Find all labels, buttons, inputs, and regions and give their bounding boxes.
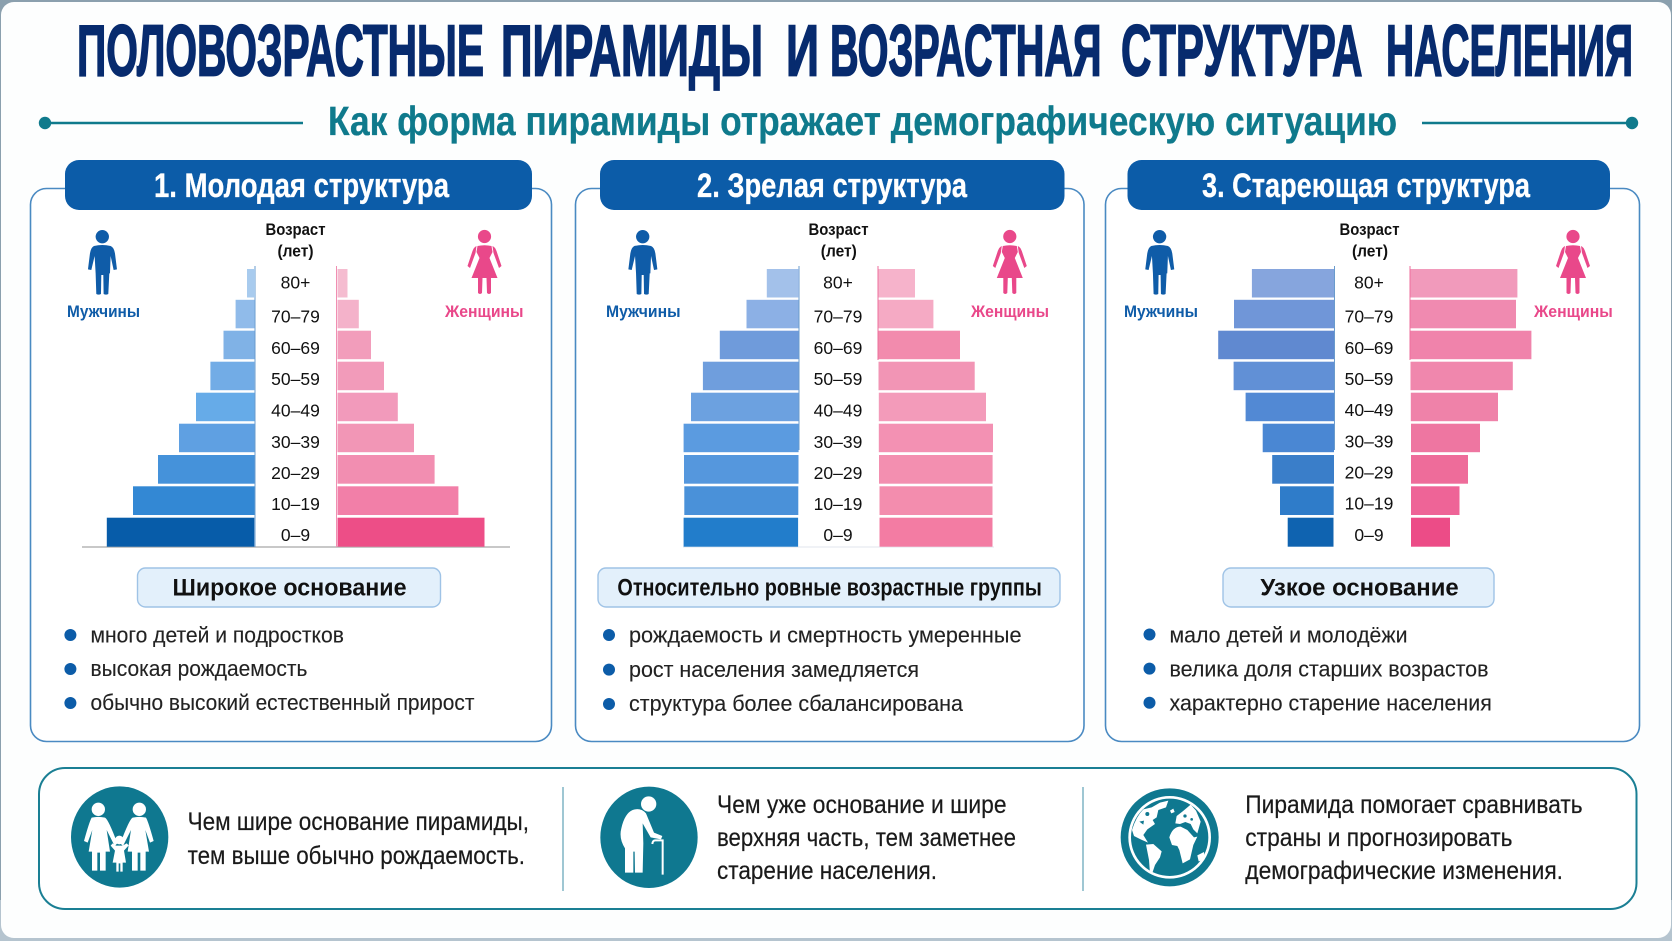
callout: even age groups: Относительно ровные возрастные группы — [617, 574, 1042, 602]
panel heading: ageing — [1128, 160, 1610, 210]
age labels: 80+ — [1354, 273, 1384, 293]
icon: elderly person — [600, 787, 698, 888]
panel heading: mature: 2. Зрелая структура — [697, 167, 968, 205]
text: comparison note — [1245, 791, 1583, 885]
icon: globe — [1121, 788, 1219, 886]
bullet list: ageing: характерно старение населения — [1170, 690, 1492, 715]
text: ageing note — [717, 791, 1016, 885]
text: comparison note: страны и прогнозировать — [1245, 824, 1512, 852]
title: И — [786, 12, 819, 92]
age labels: 0–9 — [823, 525, 853, 545]
age labels: 20–29 — [814, 463, 862, 483]
panel heading: young: 1. Молодая структура — [154, 167, 450, 205]
axis heading: age: (лет) — [821, 242, 857, 260]
icon: man — [1145, 230, 1174, 295]
text: birth rate note: Чем шире основание пирамиды, — [188, 808, 529, 836]
bullet list: young: высокая рождаемость — [90, 656, 307, 681]
axis heading: age: (лет) — [1352, 242, 1388, 260]
callout: wide base: Широкое основание — [172, 574, 406, 602]
bullet list: ageing: велика доля старших возрастов — [1170, 656, 1488, 681]
female bars — [1410, 269, 1531, 547]
callout: narrow base — [1223, 568, 1494, 607]
bullet list: young — [64, 622, 474, 715]
text: ageing note: старение населения. — [717, 857, 937, 885]
text: comparison note: демографические изменения. — [1245, 857, 1563, 885]
panel heading: mature — [600, 160, 1064, 210]
bullet list: mature: структура более сбалансирована — [629, 691, 963, 716]
title: СТРУКТУРА — [1121, 12, 1362, 92]
bullet list: young: много детей и подростков — [90, 622, 344, 647]
subtitle: Как форма пирамиды отражает демографическую ситуацию — [328, 98, 1397, 144]
text: comparison note: Пирамида помогает сравнивать — [1245, 791, 1583, 819]
age labels — [1345, 273, 1393, 545]
chart: ageing pyramid — [1218, 266, 1531, 547]
icon: woman — [1556, 230, 1590, 294]
age labels: 50–59 — [814, 369, 862, 389]
age labels: 60–69 — [271, 338, 320, 358]
female bars — [878, 269, 993, 547]
label: men: Мужчины — [67, 302, 140, 321]
bullet list: mature: рост населения замедляется — [629, 657, 919, 682]
bullet list: mature: рождаемость и смертность умеренные — [629, 622, 1022, 647]
axis heading: age: Возраст — [1340, 220, 1400, 239]
male bars — [1218, 269, 1334, 547]
age labels: 20–29 — [1345, 462, 1393, 482]
bullet list: young: обычно высокий естественный прирост — [90, 690, 474, 715]
panel: mature structure — [576, 160, 1084, 742]
icon: family — [71, 786, 168, 888]
label: men: Мужчины — [1124, 302, 1198, 321]
age labels: 80+ — [281, 273, 310, 293]
bullet list: ageing: мало детей и молодёжи — [1170, 622, 1408, 647]
age labels: 40–49 — [271, 401, 320, 421]
bullet list: ageing — [1144, 622, 1492, 715]
title: ПОЛОВОЗРАСТНЫЕ — [77, 12, 484, 92]
age labels: 50–59 — [271, 369, 320, 389]
age labels — [814, 273, 862, 545]
label: women: Женщины — [444, 302, 524, 321]
male bars — [684, 269, 799, 547]
title — [77, 12, 1633, 92]
text: ageing note: Чем уже основание и шире — [717, 791, 1006, 819]
age labels: 70–79 — [271, 307, 320, 327]
text: birth rate note: тем выше обычно рождаемость. — [188, 842, 525, 870]
age labels: 30–39 — [814, 432, 862, 452]
chart: mature pyramid — [683, 266, 994, 547]
label: women: Женщины — [970, 302, 1049, 321]
axis heading: age — [1340, 220, 1400, 260]
age labels: 80+ — [823, 273, 853, 293]
label: men: Мужчины — [606, 302, 680, 321]
age labels: 0–9 — [1354, 525, 1384, 545]
callout: even age groups — [598, 568, 1060, 607]
panel: young structure — [30, 160, 552, 742]
title: ПИРАМИДЫ — [501, 12, 763, 92]
age labels: 20–29 — [271, 463, 320, 483]
age labels: 10–19 — [271, 494, 320, 514]
age labels: 10–19 — [1345, 494, 1393, 514]
axis heading: age: Возраст — [266, 220, 326, 239]
icon: woman — [468, 230, 502, 294]
age labels: 40–49 — [1345, 400, 1393, 420]
title: ВОЗРАСТНАЯ — [830, 12, 1102, 92]
panel: takeaways — [39, 768, 1636, 909]
axis heading: age: (лет) — [278, 242, 314, 260]
age labels: 30–39 — [271, 432, 320, 452]
age labels: 10–19 — [814, 494, 862, 514]
panel: ageing structure — [1106, 160, 1640, 742]
age labels: 70–79 — [1345, 307, 1393, 327]
male bars — [107, 269, 255, 547]
icon: man — [88, 230, 117, 295]
text: ageing note: верхняя часть, тем заметнее — [717, 824, 1016, 852]
chart: young pyramid — [82, 266, 510, 547]
axis heading: age — [266, 220, 326, 260]
panel heading: young — [65, 160, 532, 210]
label: women: Женщины — [1533, 302, 1613, 321]
age labels: 70–79 — [814, 307, 862, 327]
axis heading: age — [808, 220, 868, 260]
age labels: 30–39 — [1345, 432, 1393, 452]
age labels: 0–9 — [281, 525, 310, 545]
age labels: 50–59 — [1345, 369, 1393, 389]
icon: man — [628, 230, 657, 295]
callout: wide base — [138, 568, 440, 607]
panel heading: ageing: 3. Стареющая структура — [1202, 167, 1531, 205]
callout: narrow base: Узкое основание — [1260, 574, 1459, 602]
axis heading: age: Возраст — [808, 220, 868, 239]
icon: woman — [993, 230, 1027, 294]
age labels: 60–69 — [1345, 338, 1393, 358]
bullet list: mature — [603, 622, 1022, 716]
text: birth rate note — [188, 808, 529, 870]
age labels: 60–69 — [814, 338, 862, 358]
female bars — [338, 269, 484, 547]
age labels — [271, 273, 320, 545]
age labels: 40–49 — [814, 401, 862, 421]
